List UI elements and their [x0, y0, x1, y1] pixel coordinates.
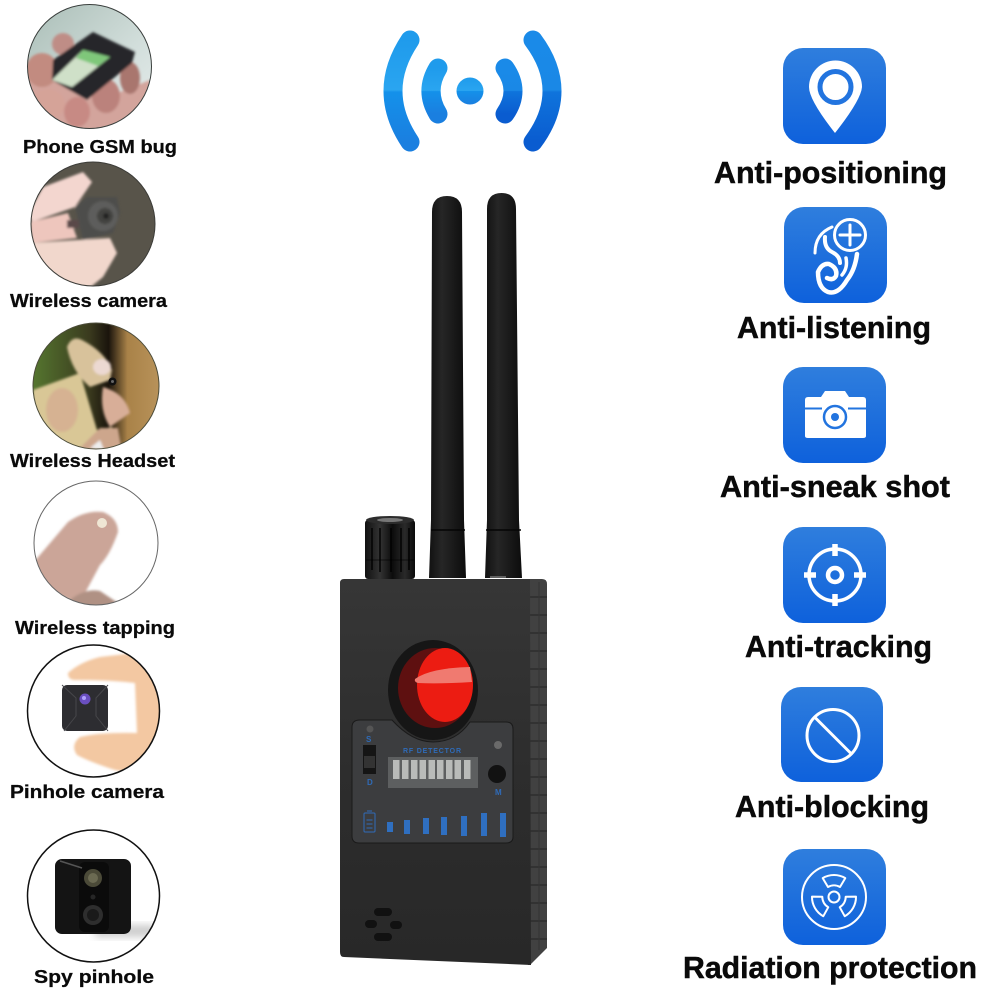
control knob	[365, 516, 415, 579]
icon: blocked sign	[781, 687, 883, 782]
label: Anti-tracking: Anti-tracking	[745, 629, 932, 664]
label: Anti-listening: Anti-listening	[737, 310, 931, 345]
label: Anti-blocking: Anti-blocking	[735, 789, 929, 824]
red lens	[388, 640, 478, 740]
icon: radiation	[783, 849, 886, 945]
photo: wireless headset	[33, 323, 159, 452]
control panel: S	[366, 735, 372, 744]
panel: left detection targets	[10, 4, 177, 987]
label: Wireless Headset: Wireless Headset	[10, 450, 175, 471]
icon: ear with plus	[784, 207, 887, 303]
label: Wireless camera: Wireless camera	[10, 290, 168, 311]
mode button	[488, 765, 506, 783]
label: Spy pinhole: Spy pinhole	[34, 966, 154, 987]
label: Radiation protection: Radiation protection	[683, 950, 977, 985]
label: RF DETECTOR: RF DETECTOR	[403, 748, 461, 755]
photo: spy pinhole	[28, 830, 160, 962]
icon: battery	[364, 811, 375, 832]
left antenna	[429, 196, 466, 578]
device: RF detector	[340, 193, 547, 965]
speaker holes	[365, 908, 402, 941]
photo: wireless camera	[28, 162, 155, 290]
icon: camera	[783, 367, 886, 463]
control panel	[352, 720, 513, 843]
label: Anti-positioning: Anti-positioning	[714, 155, 947, 190]
device side grip	[528, 579, 547, 965]
photo: wireless tapping	[33, 481, 158, 610]
device front face	[340, 579, 531, 965]
panel: protection features	[683, 48, 977, 985]
label: Wireless tapping: Wireless tapping	[15, 617, 175, 638]
signal level display	[388, 757, 478, 788]
photo: phone GSM bug	[26, 4, 153, 130]
icon: location pin	[783, 48, 886, 144]
label: Phone GSM bug: Phone GSM bug	[23, 136, 177, 157]
icon: wireless signal	[393, 40, 552, 142]
right antenna	[485, 193, 522, 578]
control panel: M	[495, 788, 502, 797]
control panel: D	[367, 778, 373, 787]
signal strength bars	[387, 813, 506, 837]
label: Anti-sneak shot: Anti-sneak shot	[720, 469, 950, 504]
label: Pinhole camera: Pinhole camera	[10, 781, 165, 802]
icon: target crosshair	[783, 527, 886, 623]
photo: pinhole camera	[28, 645, 170, 780]
